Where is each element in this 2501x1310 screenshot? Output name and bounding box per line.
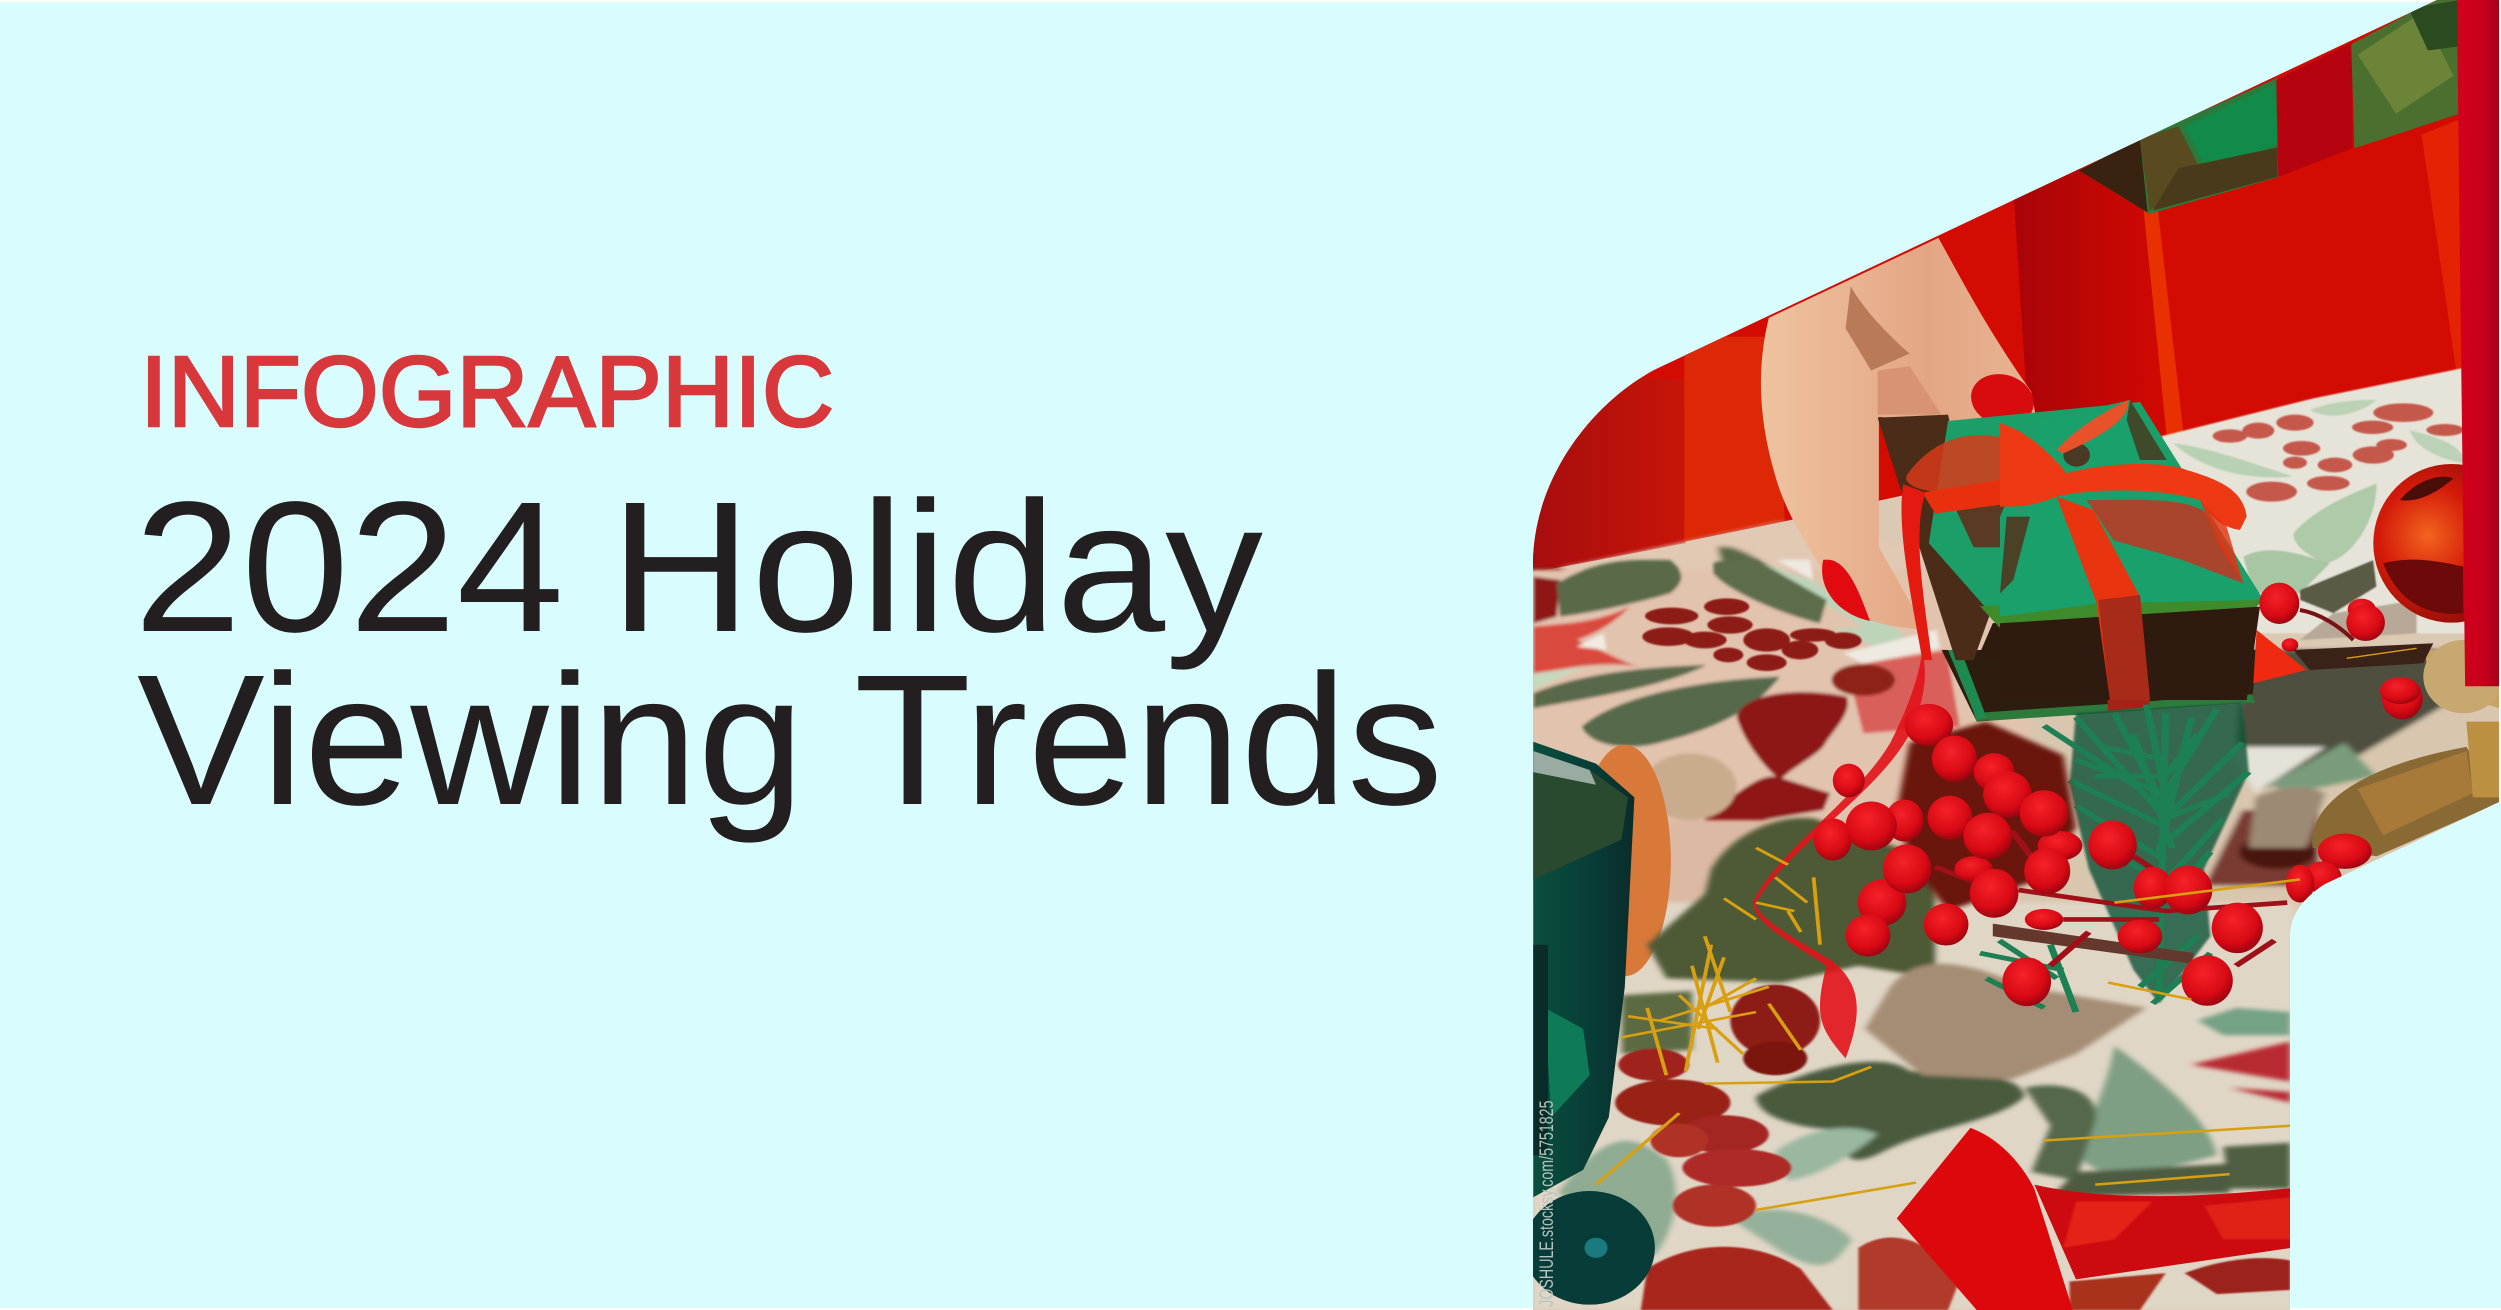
candle bbox=[2457, 0, 2501, 686]
red ribbon tail bbox=[1754, 650, 1925, 1058]
stock watermark: JOSHULE.stocksy.com/5751825 bbox=[1537, 1100, 1558, 1307]
glass base bbox=[1524, 1191, 1655, 1305]
lower table objects bbox=[1524, 650, 2501, 1310]
orange plate bbox=[1598, 744, 1671, 976]
red ribbon on table bbox=[1897, 1128, 2292, 1310]
candle base bbox=[2423, 640, 2501, 713]
vertical ribbon bbox=[2057, 497, 2150, 700]
bow bbox=[2000, 400, 2247, 583]
title: 2024 bbox=[134, 464, 564, 671]
pine sprig bbox=[1980, 703, 2249, 1012]
title: Viewing Trends bbox=[137, 637, 1443, 844]
gift underside bbox=[1942, 650, 2258, 722]
lower tablecloth layer bbox=[1533, 650, 2501, 1310]
eyebrow label: INFOGRAPHIC bbox=[140, 336, 834, 448]
ornament bbox=[2373, 464, 2501, 623]
gold tinsel bbox=[1596, 848, 2300, 1210]
tablecloth right of the gift bbox=[2160, 367, 2470, 640]
dark foliage behind berries bbox=[1897, 722, 2076, 911]
tablecloth pattern beside the hand bbox=[1530, 560, 2030, 820]
glass tumbler bbox=[1533, 742, 1634, 1197]
red wall bbox=[1500, 0, 2501, 579]
green gift on shelf (right) bbox=[2351, 0, 2460, 148]
candle holder bbox=[2312, 650, 2501, 856]
ribbon tail right bbox=[2253, 630, 2307, 683]
branch near gift bbox=[2293, 610, 2433, 670]
tablecloth lower bbox=[1533, 650, 2501, 1310]
printed coral berries bbox=[2213, 403, 2464, 502]
printed berries bbox=[1642, 598, 1862, 671]
hand, gift left side and candle bbox=[1761, 238, 2265, 660]
tablecloth upper left bbox=[1534, 519, 1790, 572]
red floral shapes bbox=[1615, 985, 2290, 1310]
title bbox=[134, 464, 1443, 844]
gift, bow and ornament right side bbox=[2000, 400, 2501, 713]
dark band on gift bbox=[2276, 42, 2352, 177]
holly berries near gift bbox=[2259, 583, 2420, 704]
berries by candle plate bbox=[2286, 834, 2372, 903]
berry stems bbox=[1935, 831, 2287, 966]
gift top face bbox=[2000, 400, 2263, 700]
dark leaves bbox=[1558, 818, 2290, 1265]
hand bbox=[1761, 238, 2042, 629]
branch bbox=[1993, 924, 2194, 964]
green gift on shelf (left) bbox=[2079, 78, 2280, 214]
upper background layer bbox=[1500, 0, 2501, 716]
berry cluster bbox=[1814, 677, 2423, 1006]
ribbon bow left bbox=[1902, 435, 2000, 660]
photo panel: holiday gift on patterned tablecloth bbox=[1500, 0, 2501, 1310]
gift box left face and top bbox=[1878, 402, 2265, 660]
title: Holiday bbox=[610, 464, 1263, 671]
